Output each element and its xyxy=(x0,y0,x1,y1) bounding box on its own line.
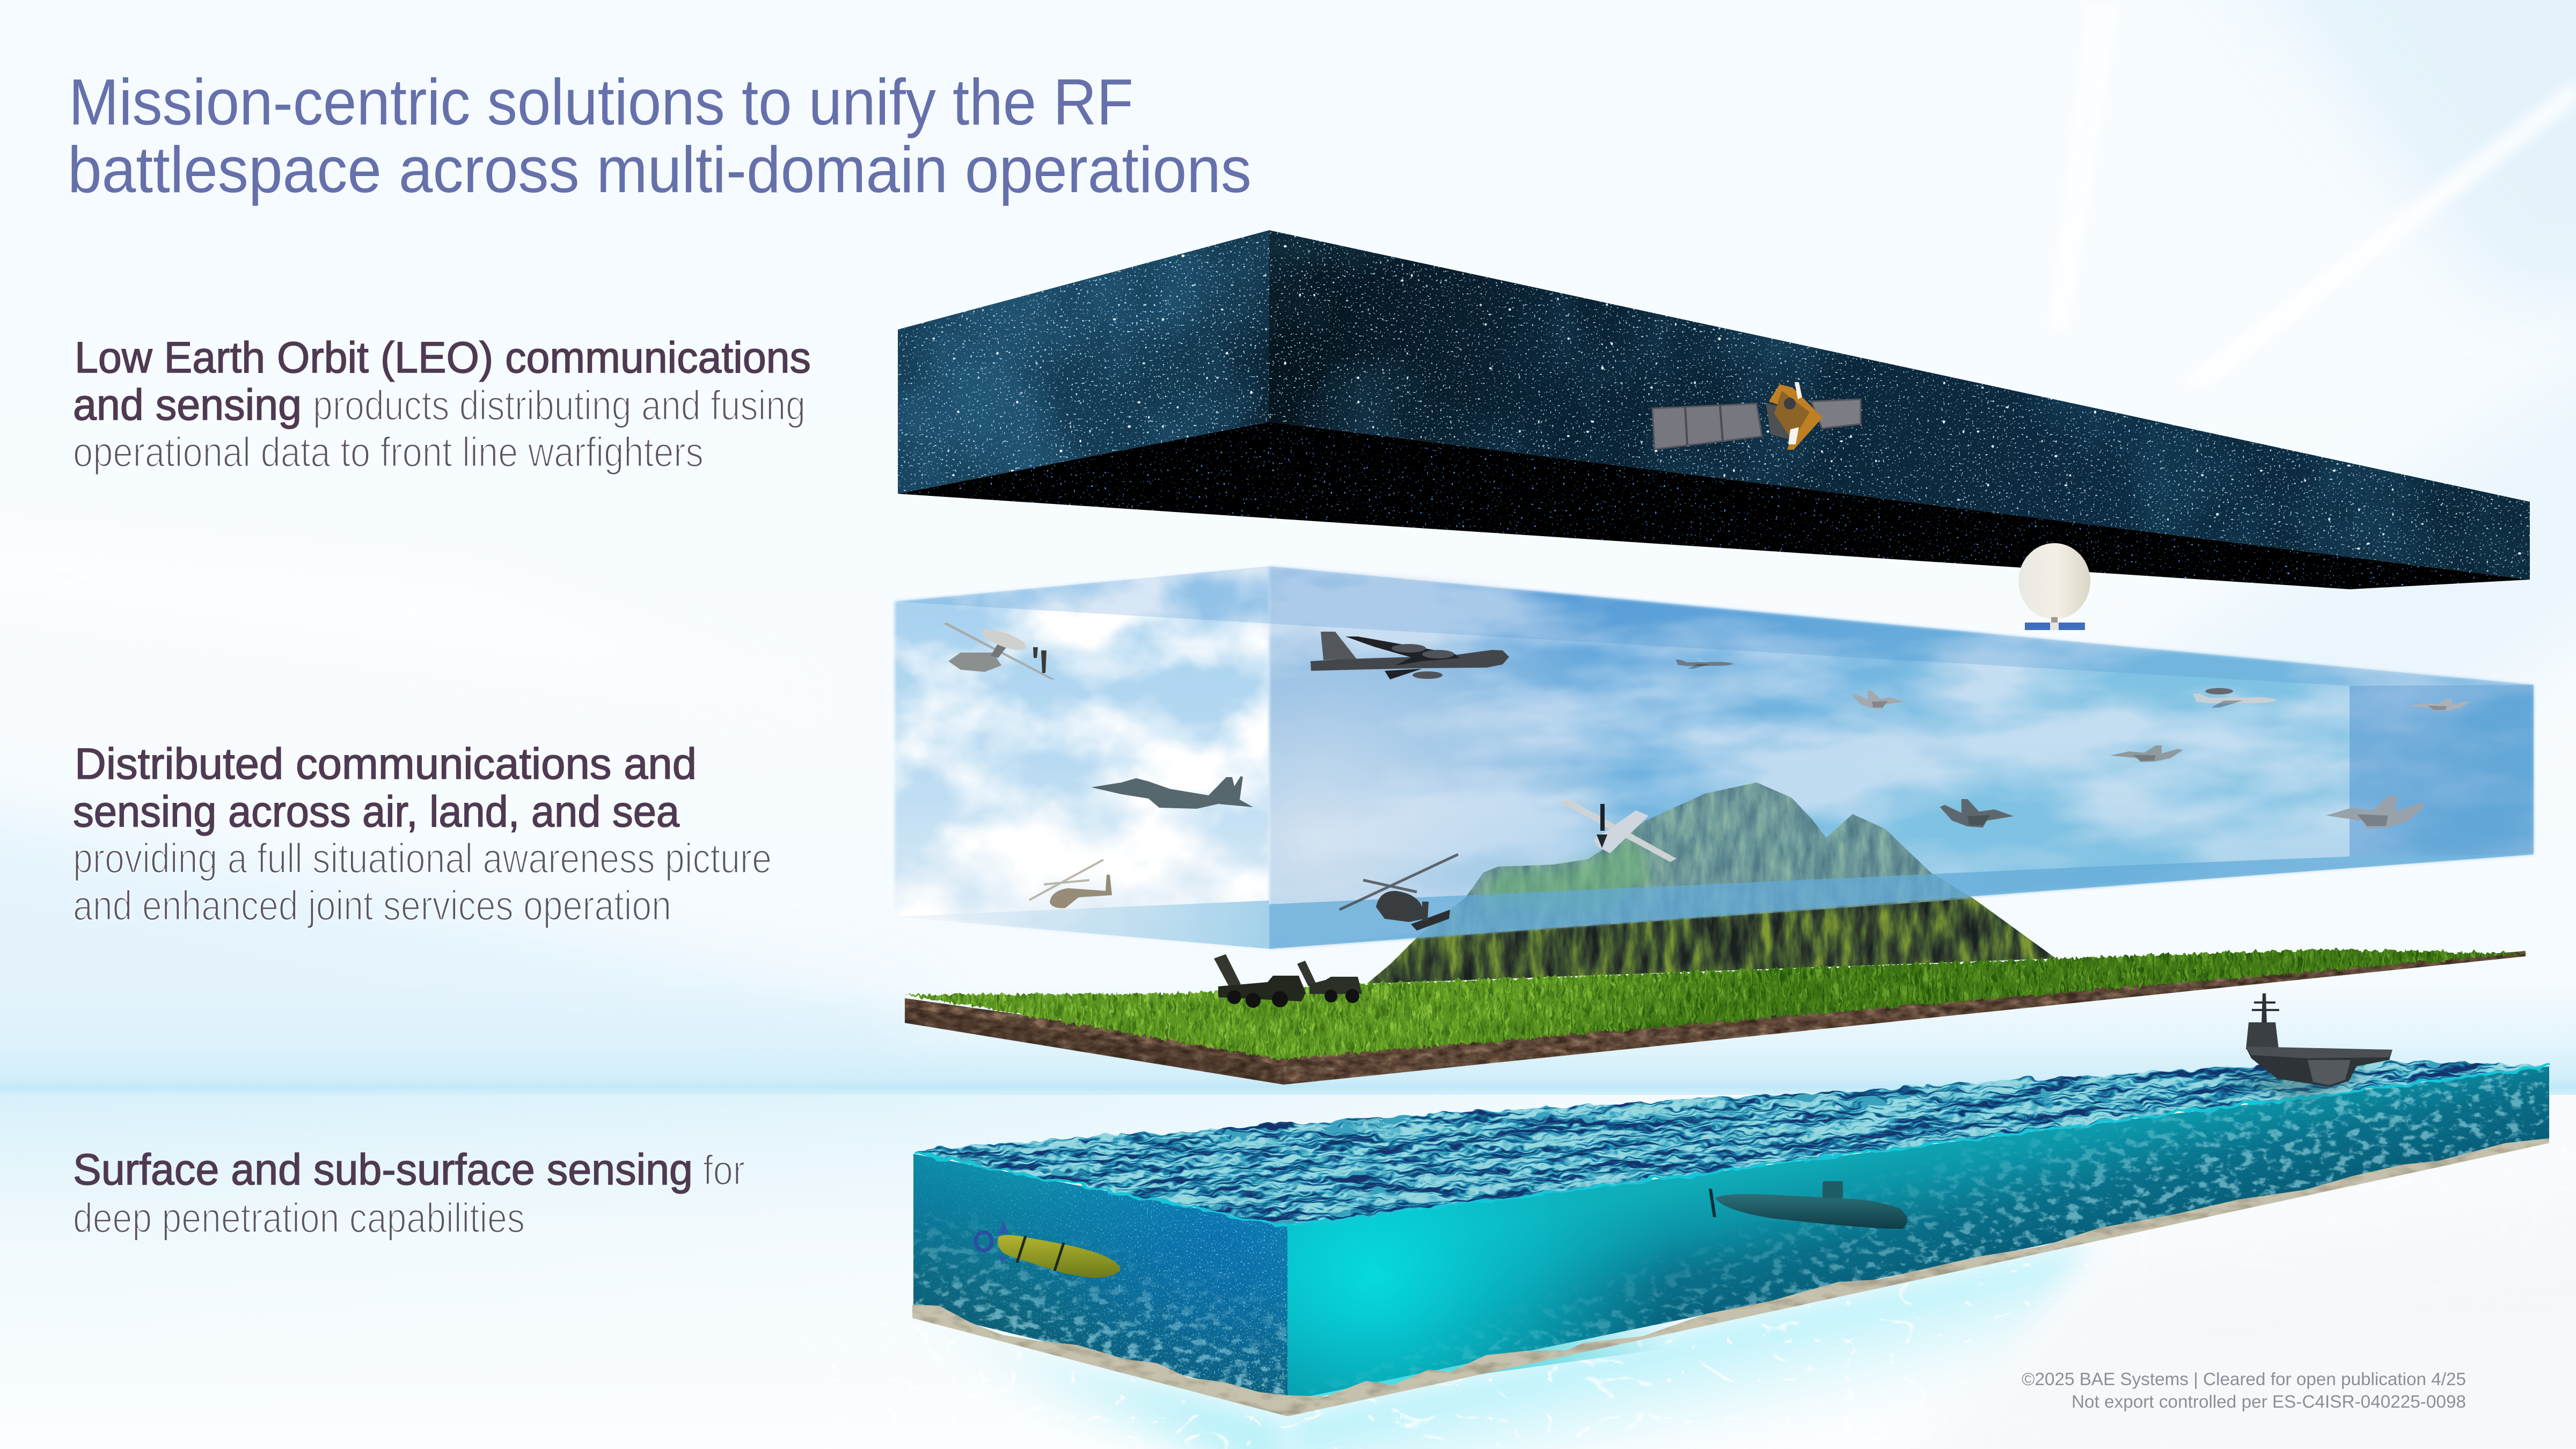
sky front face xyxy=(1269,566,2534,949)
text block: LEO: Low Earth Orbit (LEO) communications xyxy=(75,333,811,382)
sky top inner plane xyxy=(895,566,2534,686)
icon: satellite xyxy=(1652,382,1861,450)
panel: sea layer xyxy=(907,993,2555,1416)
sky left face xyxy=(895,566,1269,949)
panel: air layer xyxy=(895,566,2534,984)
icon: Black Hawk helicopter xyxy=(1340,854,1458,931)
title: battlespace across multi-domain operations xyxy=(68,133,1252,206)
text block: LEO xyxy=(73,333,811,475)
sky bottom inner plane front xyxy=(1269,854,2534,949)
ocean surface xyxy=(907,1055,2555,1229)
sky right inner panel xyxy=(2350,685,2534,857)
icon: small drone xyxy=(1675,658,1733,669)
text block: air land sea: and enhanced joint services operation xyxy=(73,882,671,929)
text block: surface: for xyxy=(703,1146,745,1194)
water caustics below sea xyxy=(805,1143,2576,1449)
space front face xyxy=(1269,230,2530,580)
icon: missile launcher trucks xyxy=(1214,954,1362,1008)
icon: F-18 xyxy=(1559,800,1677,862)
grass top xyxy=(896,945,2538,1065)
panel: land layer xyxy=(896,873,2538,1085)
text block: surface xyxy=(73,1145,745,1241)
aircraft group xyxy=(943,623,2470,931)
mountain lower xyxy=(1367,897,2055,984)
footer credit: Not export controlled per ES-C4ISR-040225-0098 xyxy=(2072,1392,2466,1411)
space left face xyxy=(898,230,1269,494)
water right face xyxy=(1287,1066,2549,1401)
icon: B-52 bomber xyxy=(1311,632,1509,679)
text block: LEO: and sensing xyxy=(73,380,302,429)
text block: air land sea: Distributed communications and xyxy=(75,740,697,788)
icon: large transport xyxy=(2326,796,2425,829)
icon: tactical jet xyxy=(2110,745,2183,762)
icon: high-altitude balloon xyxy=(2018,543,2090,630)
icon: AWACS xyxy=(2193,688,2277,707)
icon: Apache helicopter xyxy=(1029,860,1112,908)
text block: surface: deep penetration capabilities xyxy=(73,1194,525,1241)
icon: E-2 Hawkeye xyxy=(943,623,1055,679)
text block: air land sea: sensing across air, land, and sea xyxy=(73,787,679,836)
footer credit: ©2025 BAE Systems | Cleared for open publication 4/25 xyxy=(2022,1369,2466,1389)
soil slab xyxy=(905,951,2526,1085)
text block: LEO: products distributing and fusing xyxy=(313,382,806,429)
footer credit xyxy=(2022,1369,2466,1411)
icon: aircraft carrier xyxy=(2216,993,2392,1100)
icon: F-16 xyxy=(1940,799,2014,828)
mountain seen through glass xyxy=(1367,782,2056,984)
icon: far drone xyxy=(2408,699,2470,711)
space bottom face xyxy=(898,422,2530,589)
water left face xyxy=(913,1154,1287,1401)
title: Mission-centric solutions to unify the RF xyxy=(69,65,1133,138)
text block: LEO: operational data to front line warfighters xyxy=(73,428,704,475)
text block: air land sea: providing a full situational awareness picture xyxy=(73,835,772,882)
icon: F-15 xyxy=(1091,776,1253,809)
sand floor xyxy=(912,1138,2549,1416)
icon: submarine xyxy=(1709,1181,1907,1229)
text block: surface: Surface and sub-surface sensing xyxy=(73,1145,693,1194)
text block: air land sea xyxy=(73,740,772,929)
title xyxy=(68,65,1252,206)
panel: space layer xyxy=(898,230,2530,589)
icon: underwater vehicle UUV xyxy=(976,1220,1121,1278)
icon: light jet xyxy=(1853,691,1904,709)
sky bottom inner plane left xyxy=(895,901,1269,949)
